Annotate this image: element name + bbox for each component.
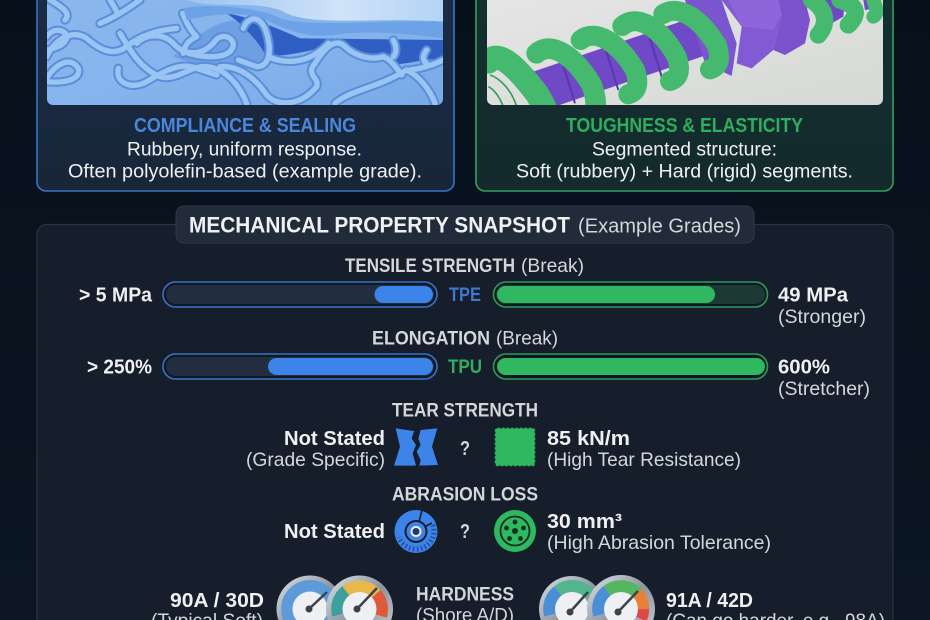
icon: intact green patch xyxy=(496,428,534,466)
row: tensile strength xyxy=(79,255,866,328)
value: TPU elongation: (Stretcher) xyxy=(778,378,870,400)
value: TPU elongation xyxy=(778,356,870,400)
text: TPU description line one: Segmented structure: xyxy=(592,138,777,160)
label: TPU: TPU xyxy=(448,357,482,378)
value: TPE tear: (Grade Specific) xyxy=(246,449,385,471)
value: TPE tear: Not Stated xyxy=(284,427,385,450)
text: TPU description line two: Soft (rubbery) + Hard (rigid) segments. xyxy=(516,160,853,182)
icon: torn sheet xyxy=(394,428,438,466)
text: TPE description line two: Often polyolefin-based (example grade). xyxy=(68,160,422,182)
heading pill: mechanical property snapshot: MECHANICAL PROPERTY SNAPSHOT xyxy=(189,212,570,238)
value: TPU tear xyxy=(547,427,741,471)
value: TPE abrasion: Not Stated xyxy=(284,520,385,543)
row: hardness xyxy=(151,575,885,620)
value: TPE tear xyxy=(246,427,385,471)
value: TPU hardness xyxy=(666,589,885,620)
gauge: TPU Shore A xyxy=(539,576,605,620)
row: tensile strength: (Break) xyxy=(521,255,584,277)
bar: TPU tensile xyxy=(494,282,768,307)
value: TPU tensile xyxy=(778,284,866,328)
value: TPU tear: 85 kN/m xyxy=(547,427,630,450)
heading: compliance and sealing: COMPLIANCE & SEALING xyxy=(134,115,356,137)
row: abrasion loss: ABRASION LOSS xyxy=(392,484,538,506)
value: TPU tensile: (Stronger) xyxy=(778,306,866,328)
label: hardness xyxy=(416,584,514,620)
gauge: TPE Shore A xyxy=(276,576,344,620)
image: segmented bolt with green rings xyxy=(487,0,883,115)
row: elongation: ELONGATION xyxy=(372,328,490,350)
text: TPE description line one: Rubbery, uniform response. xyxy=(127,138,362,160)
bar: TPU elongation xyxy=(494,354,768,379)
panel: mechanical property snapshot xyxy=(37,206,893,620)
row: abrasion loss xyxy=(284,484,771,554)
value: TPE elongation: > 250% xyxy=(87,356,152,378)
label: hardness: HARDNESS xyxy=(416,584,514,606)
heading: toughness and elasticity: TOUGHNESS & ELASTICITY xyxy=(566,115,804,137)
row: tear strength: TEAR STRENGTH xyxy=(392,400,538,422)
label: TPE: TPE xyxy=(449,285,481,306)
value: TPU abrasion xyxy=(547,510,771,554)
heading pill: mechanical property snapshot xyxy=(176,206,754,243)
row: elongation xyxy=(87,328,870,400)
value: TPU tear: (High Tear Resistance) xyxy=(547,449,741,471)
gauge: TPE Shore D xyxy=(326,576,393,620)
row: elongation: (Break) xyxy=(496,328,558,350)
row: tear strength xyxy=(246,400,741,471)
value: TPE hardness xyxy=(151,589,264,620)
question mark: tear: ? xyxy=(460,438,470,460)
icon: tire xyxy=(494,510,536,552)
panel: TPE compliance and sealing xyxy=(37,0,454,191)
heading pill: mechanical property snapshot: (Example Grades) xyxy=(578,214,741,238)
row: tensile strength: TENSILE STRENGTH xyxy=(345,255,515,277)
image: polymer chain network xyxy=(47,0,443,105)
value: TPU abrasion: (High Abrasion Tolerance) xyxy=(547,532,771,554)
value: TPU hardness: 91A / 42D xyxy=(666,589,753,612)
value: TPU tensile: 49 MPa xyxy=(778,284,849,306)
value: TPU abrasion: 30 mm³ xyxy=(547,510,622,533)
question mark: abrasion: ? xyxy=(460,521,470,543)
icon: brake disc xyxy=(394,510,438,553)
bar: TPE tensile xyxy=(163,282,437,307)
panel: TPU toughness and elasticity xyxy=(476,0,893,191)
value: TPU elongation: 600% xyxy=(778,356,830,378)
gauge: TPU Shore D xyxy=(587,575,655,620)
value: TPE tensile: > 5 MPa xyxy=(79,284,153,306)
bar: TPE elongation xyxy=(163,354,437,379)
value: TPE hardness: 90A / 30D xyxy=(170,589,264,612)
